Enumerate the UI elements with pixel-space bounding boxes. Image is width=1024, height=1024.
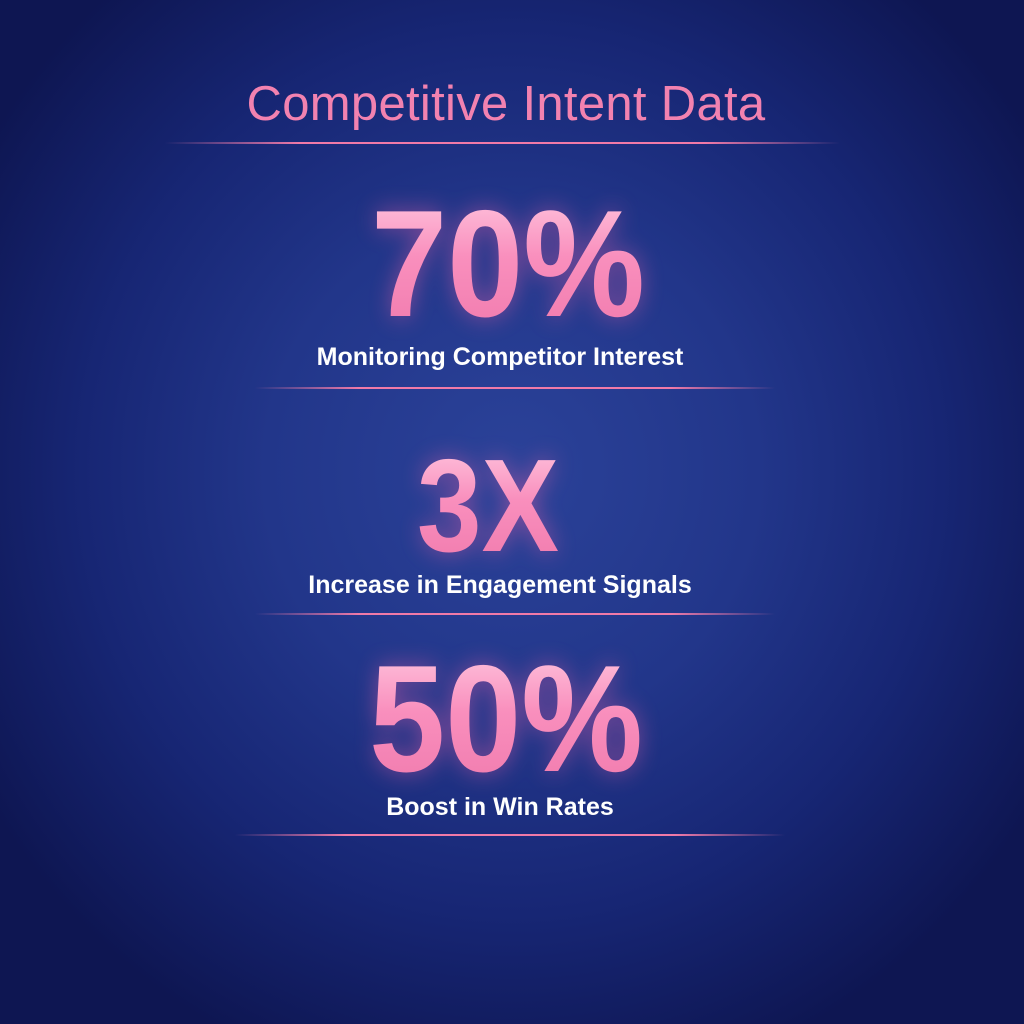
big number 50%	[45, 643, 967, 795]
big number 3X	[37, 440, 939, 572]
label: monitoring: Monitoring Competitor Interest	[317, 343, 683, 371]
big number 50%: 50%	[369, 634, 643, 804]
stat: 70%	[317, 179, 684, 371]
label: engagement: Increase in Engagement Signals	[308, 571, 692, 599]
big number 3X: 3X	[417, 432, 559, 579]
stat: 3X	[308, 432, 692, 599]
big number 70%	[47, 188, 969, 340]
big number 70%: 70%	[371, 179, 645, 349]
stat: 50%	[364, 634, 652, 821]
label: win rates: Boost in Win Rates	[386, 793, 614, 821]
title: Competitive Intent Data	[247, 77, 765, 131]
